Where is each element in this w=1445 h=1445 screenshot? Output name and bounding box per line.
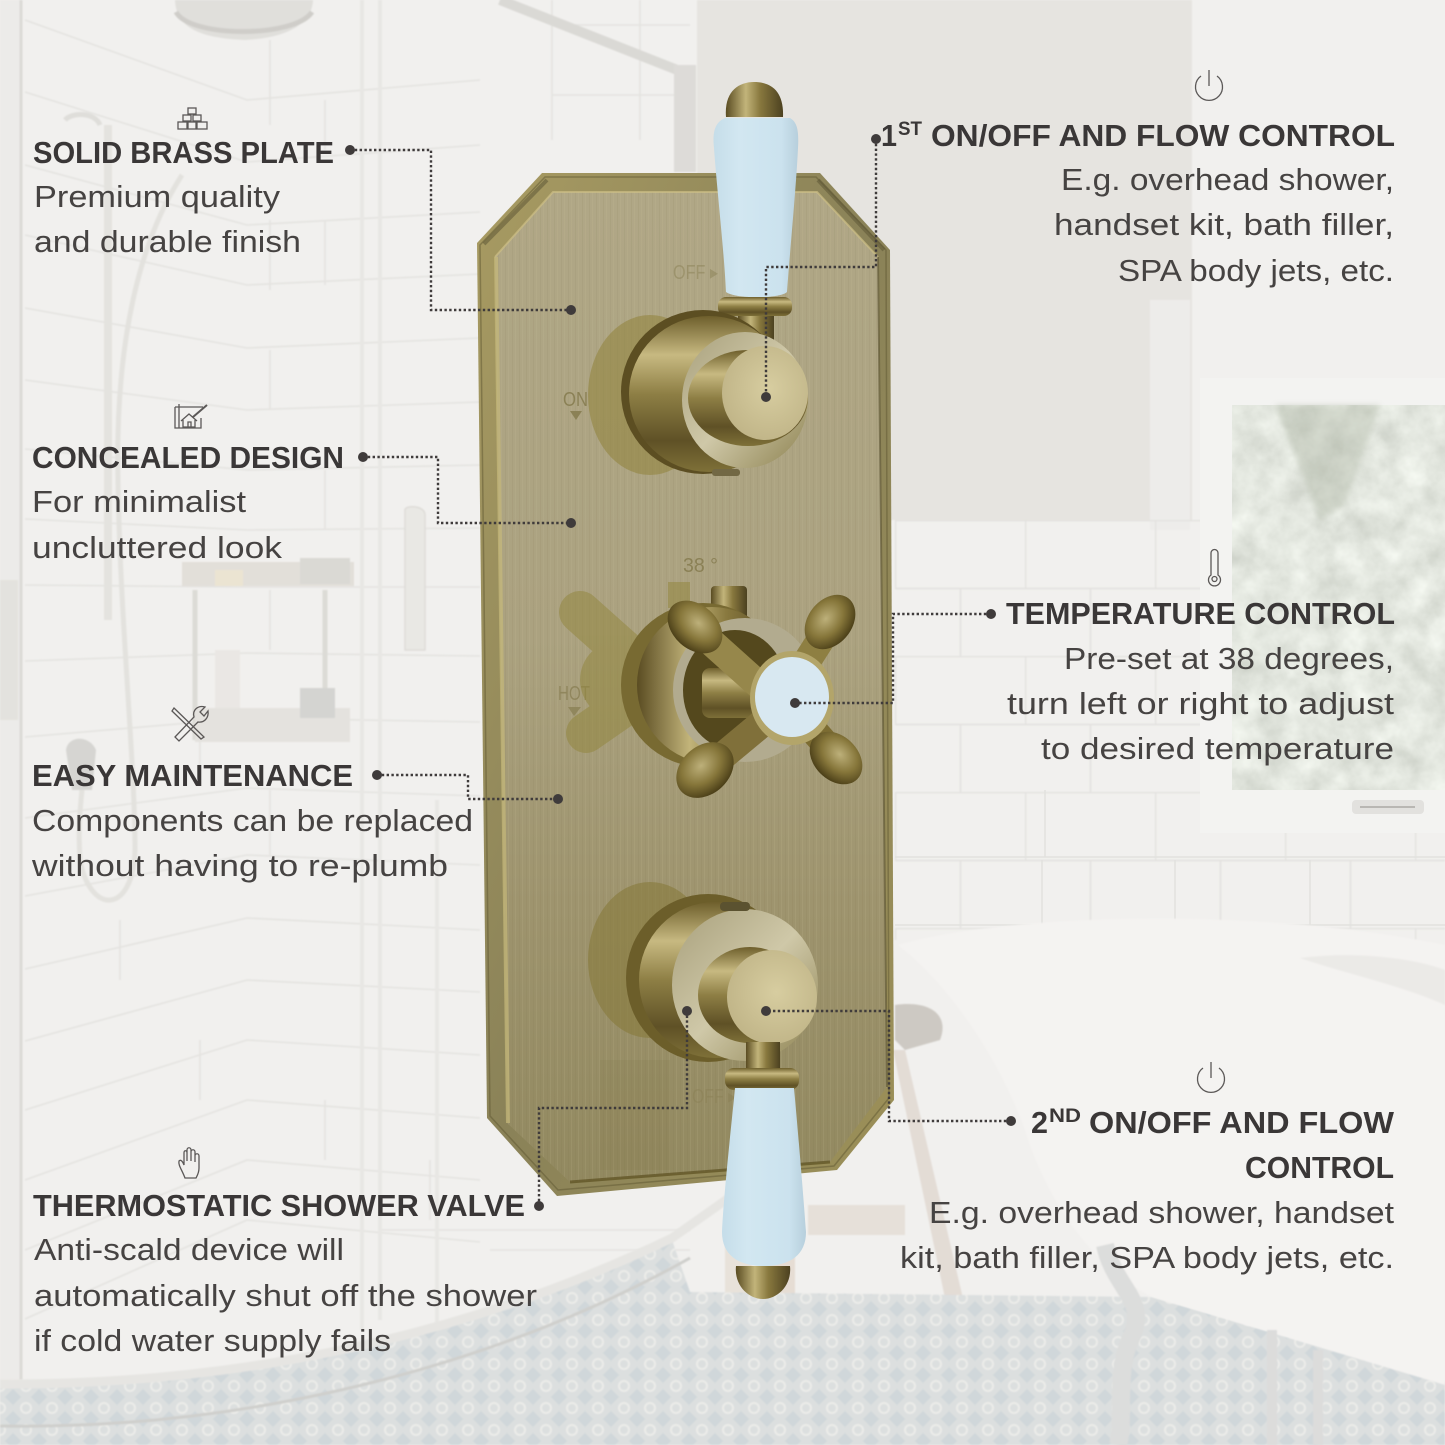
callout: second on/off and flow control: ON/OFF AND FLOW (1089, 1105, 1395, 1140)
callout: second on/off and flow control: kit, bath filler, SPA body jets, etc. (900, 1240, 1394, 1275)
callout: second on/off and flow control (900, 1062, 1395, 1275)
icon: power (1196, 70, 1222, 100)
icon: thermometer (1209, 550, 1220, 586)
valve plate (477, 173, 894, 1196)
background: window (1200, 378, 1445, 833)
icon: hand (179, 1148, 199, 1178)
background: bath tub (898, 919, 1445, 1445)
callout: easy maintenance (31, 707, 473, 883)
callout: solid brass plate: SOLID BRASS PLATE (33, 135, 334, 170)
door handle (405, 507, 425, 650)
body rings (621, 603, 785, 767)
wall tile joints (25, 0, 690, 1319)
callout: temperature control: Pre-set at 38 degrees, (1064, 641, 1394, 676)
callout: easy maintenance: without having to re-plumb (31, 848, 448, 883)
shelf (182, 562, 354, 586)
handle shadow (580, 595, 690, 733)
ceramic lever (713, 118, 798, 297)
engraved labels on plate: 38 ° (683, 555, 718, 577)
callout: first on/off and flow control (881, 70, 1395, 288)
shower head (175, 0, 313, 40)
knob shadow (588, 315, 712, 475)
knob shadow (588, 882, 712, 1038)
callout: second on/off and flow control: ND (1049, 1106, 1081, 1127)
callout: thermostatic shower valve: Anti-scald device will (34, 1232, 344, 1267)
callout: first on/off and flow control: ON/OFF AND FLOW CONTROL (931, 118, 1395, 153)
callout: thermostatic shower valve: if cold water supply fails (34, 1323, 391, 1358)
engraved labels on plate (558, 262, 736, 1108)
callout: solid brass plate (33, 108, 334, 259)
leader lines (345, 134, 1016, 1211)
engraved labels on plate: OFF ▸ (692, 1086, 736, 1108)
collar (718, 297, 792, 316)
callout: temperature control: to desired temperature (1041, 731, 1394, 766)
callout: concealed design: For minimalist (32, 484, 246, 519)
knob body (626, 894, 818, 1062)
bottom control knob and lever (588, 882, 818, 1299)
callout: second on/off and flow control: E.g. overhead shower, handset (929, 1195, 1394, 1230)
icon: power (1198, 1062, 1224, 1092)
temperature control cross handle (580, 585, 873, 809)
callout: thermostatic shower valve (33, 1148, 537, 1358)
callout: solid brass plate: Premium quality (34, 179, 281, 214)
callout: first on/off and flow control: 1 (881, 118, 897, 153)
callout: temperature control: turn left or right to adjust (1007, 686, 1394, 721)
callout: temperature control: TEMPERATURE CONTROL (1006, 596, 1395, 631)
riser and hose (104, 125, 112, 620)
pin (711, 586, 747, 620)
engraved labels on plate: HOT (558, 683, 590, 705)
ceramic button (750, 651, 834, 745)
callout: easy maintenance: Components can be replaced (32, 803, 473, 838)
engraved labels on plate: OFF ▸ (673, 262, 718, 284)
callout: concealed design: CONCEALED DESIGN (32, 440, 344, 475)
knob body (621, 310, 808, 474)
callout: solid brass plate: and durable finish (34, 224, 301, 259)
engraved labels on plate: ON (563, 389, 588, 411)
callout: first on/off and flow control: ST (898, 119, 922, 140)
callout: second on/off and flow control: CONTROL (1245, 1150, 1394, 1185)
ceramic lever (722, 1088, 806, 1266)
callout: thermostatic shower valve: automatically shut off the shower (34, 1278, 537, 1313)
icon: wrench and screwdriver (172, 707, 208, 741)
callout: first on/off and flow control: handset kit, bath filler, (1054, 207, 1394, 242)
background: stool and floor (0, 1004, 1445, 1445)
collar (725, 1068, 799, 1090)
cross arms (657, 585, 873, 809)
callout: second on/off and flow control: 2 (1031, 1105, 1048, 1140)
callout: first on/off and flow control: E.g. overhead shower, (1061, 162, 1394, 197)
callout: first on/off and flow control: SPA body jets, etc. (1118, 253, 1394, 288)
callout: concealed design (32, 404, 344, 565)
callout: temperature control (1006, 550, 1395, 766)
lever cap (726, 82, 783, 117)
icon: house blueprint (175, 404, 207, 428)
callout: concealed design: uncluttered look (32, 530, 283, 565)
callout: easy maintenance: EASY MAINTENANCE (32, 758, 353, 793)
lever cap (736, 1266, 790, 1299)
callout: thermostatic shower valve: THERMOSTATIC SHOWER VALVE (33, 1188, 525, 1223)
icon: brass bars (178, 108, 207, 129)
top control knob and lever (588, 82, 808, 476)
background: tiles below window (895, 790, 1445, 925)
